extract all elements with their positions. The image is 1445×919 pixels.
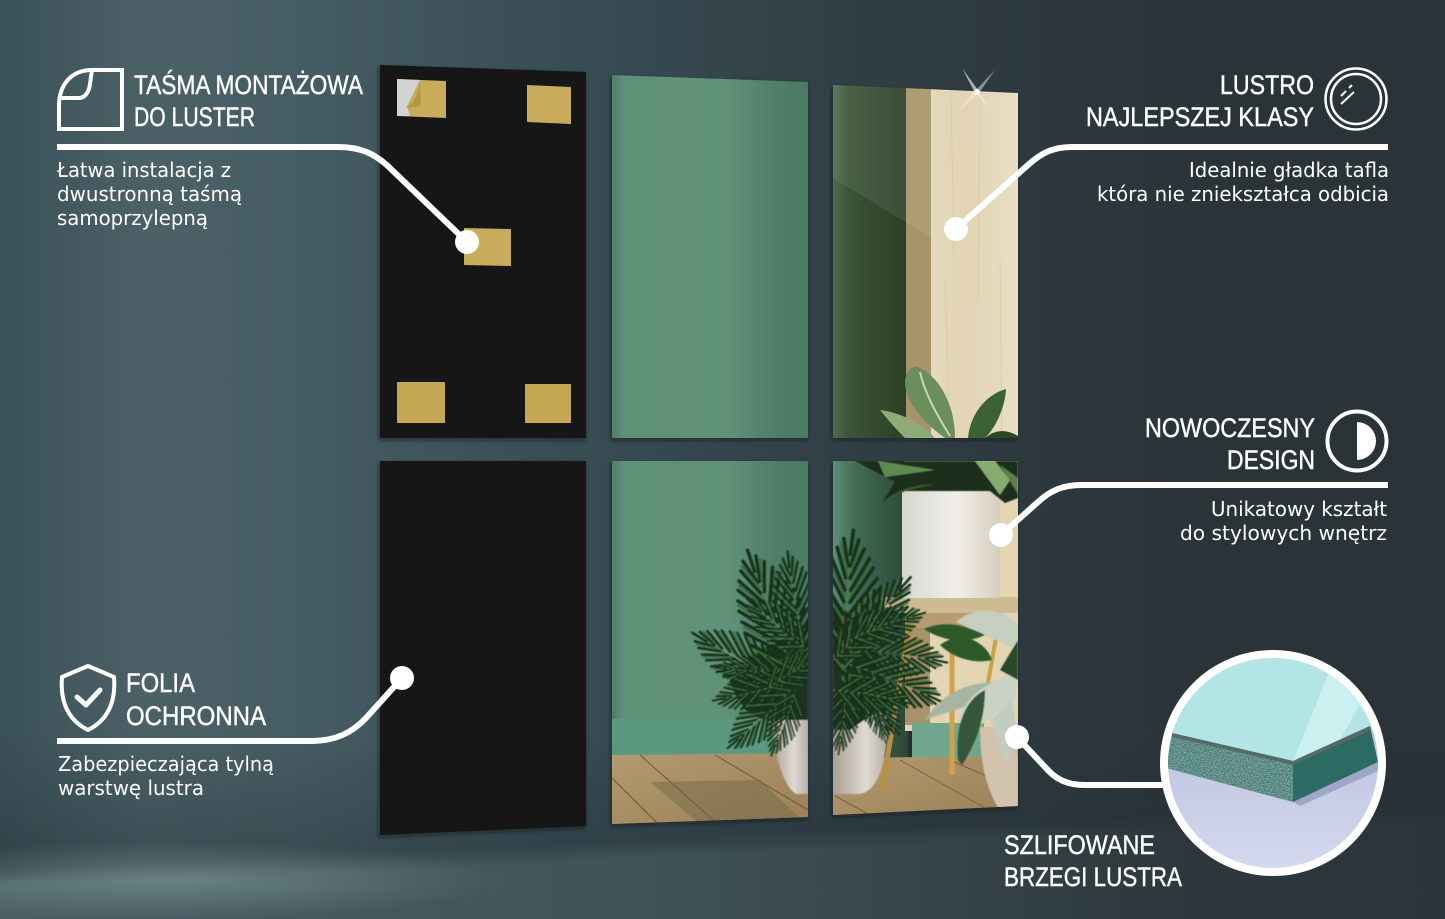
description: która nie zniekształca odbicia [1097, 182, 1389, 206]
baseboard [912, 723, 984, 759]
magnifier: polished mirror edge [1160, 650, 1390, 880]
heading [1145, 413, 1315, 475]
description: Zabezpieczająca tylną [58, 752, 274, 776]
heading: FOLIA [126, 668, 195, 698]
plant above pot [855, 461, 1018, 503]
description [58, 752, 274, 800]
panel: mirror back top with mounting tape [380, 65, 586, 438]
connector dot [944, 217, 968, 241]
description: Idealnie gładka tafla [1189, 158, 1389, 182]
variegated plant [924, 611, 1018, 808]
description: warstwę lustra [58, 776, 204, 800]
heading: NAJLEPSZEJ KLASY [1086, 102, 1314, 132]
gloss reflection [833, 85, 931, 238]
icon: half circle [1328, 412, 1386, 470]
heading [1004, 830, 1182, 892]
description: dwustronną taśmą [57, 182, 242, 206]
tape patch: top right [527, 85, 571, 124]
connector line [57, 147, 467, 242]
heading: NOWOCZESNY [1145, 413, 1315, 443]
heading: BRZEGI LUSTRA [1004, 862, 1182, 892]
tape patch: centre [464, 228, 511, 266]
icon: mirror [1326, 68, 1386, 130]
callout: best class mirror [944, 68, 1389, 241]
heading: DESIGN [1227, 445, 1315, 475]
potted palm, left half [690, 548, 808, 795]
callout: polished edges [1004, 725, 1182, 892]
heading: OCHRONNA [126, 701, 266, 731]
heading [1086, 70, 1314, 132]
connector line [1017, 737, 1165, 785]
heading: TAŚMA MONTAŻOWA [134, 68, 363, 100]
connector dot [390, 666, 414, 690]
connector dot [1005, 725, 1029, 749]
heading [126, 668, 266, 731]
description: do stylowych wnętrz [1180, 521, 1387, 545]
palm, right half [833, 528, 949, 794]
description [56, 158, 242, 230]
connector line [1001, 485, 1388, 535]
heading: SZLIFOWANE [1004, 830, 1155, 860]
icon: shield [62, 666, 114, 730]
callout: modern design [989, 412, 1388, 547]
description: samoprzylepną [57, 206, 208, 230]
panel: mirror front top middle [612, 75, 808, 438]
panel: mirror front bottom middle [612, 461, 833, 826]
heading: LUSTRO [1220, 70, 1314, 100]
callout: mounting tape [56, 68, 479, 254]
heading: DO LUSTER [134, 102, 255, 132]
description [1180, 497, 1387, 545]
connector dot [989, 523, 1013, 547]
background wall and floor [0, 0, 1058, 919]
icon: sparkle [958, 68, 995, 112]
connector line [956, 147, 1388, 229]
panel: mirror back bottom with protective film [380, 461, 586, 835]
tape patch: bottom right [525, 384, 571, 423]
icon: tape sheet [59, 70, 122, 129]
panel: mirror front bottom right [830, 461, 1018, 818]
stand with white pot [881, 491, 1018, 790]
panel: mirror front top right [833, 85, 1018, 438]
description [1097, 158, 1389, 206]
connector dot [455, 230, 479, 254]
callout: protective film [57, 666, 414, 800]
description: Unikatowy kształt [1211, 497, 1387, 521]
description: Łatwa instalacja z [56, 158, 231, 182]
heading [134, 68, 363, 132]
leaves of plant [880, 366, 1018, 438]
connector line [57, 678, 402, 741]
tape patch: bottom left [397, 382, 445, 423]
tape patch: top left peeled [397, 79, 446, 118]
